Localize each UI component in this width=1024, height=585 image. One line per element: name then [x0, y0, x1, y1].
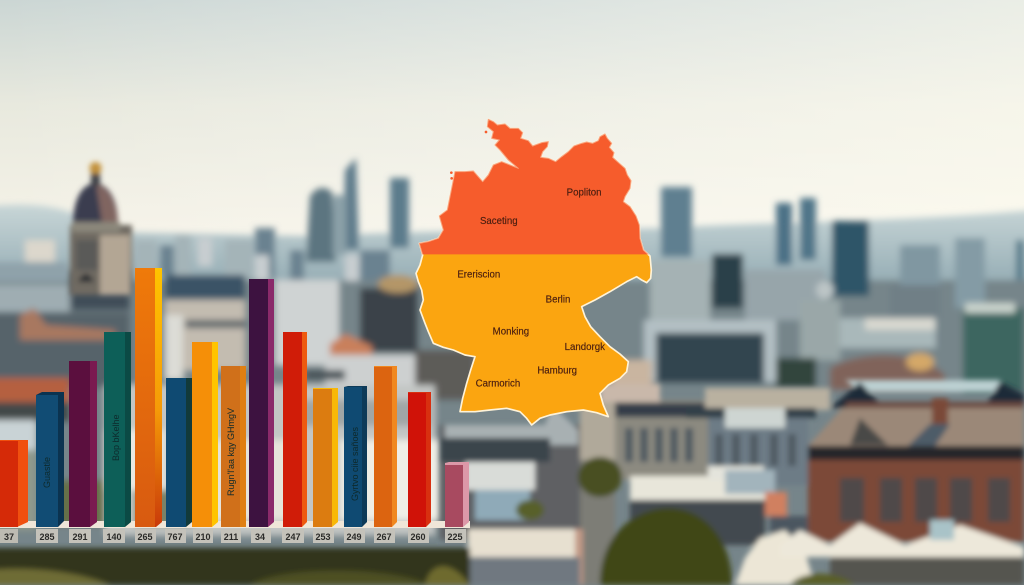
map outline: [416, 119, 651, 425]
value labels: 767: [167, 532, 183, 542]
map labels: Hamburg: [537, 365, 577, 376]
map labels: Ereriscion: [457, 269, 500, 280]
value labels: 267: [376, 532, 392, 542]
map labels: Popliton: [567, 188, 602, 199]
dome building: [70, 225, 132, 295]
distant towers right: [661, 187, 692, 257]
mid left city: [0, 285, 70, 315]
bar 8: Rugn'l'aa kqy GHmgV: [226, 408, 236, 496]
map labels: Monking: [493, 326, 529, 337]
bar chart: [0, 268, 470, 543]
map labels: Berlin: [546, 295, 570, 306]
bar 13: [374, 366, 397, 527]
value labels: 291: [72, 532, 88, 542]
map labels: [457, 188, 605, 389]
white roofs foreground: [468, 529, 580, 557]
foreground historic buildings: [615, 400, 708, 480]
background: blurred city skyline: [0, 158, 1024, 585]
bar 6: [166, 378, 192, 527]
bar 8: [221, 366, 246, 527]
value labels: 34: [255, 532, 265, 542]
trees: [600, 508, 732, 585]
bar 11: [313, 388, 338, 527]
value labels: 140: [106, 532, 122, 542]
bar 4: [104, 332, 131, 527]
bar 12: Gyrtvo ciie sañoes: [350, 426, 360, 501]
value labels: 247: [285, 532, 301, 542]
map labels: Saceting: [480, 216, 518, 227]
value labels: 211: [224, 532, 238, 542]
map islands: [450, 131, 487, 180]
value labels: 265: [137, 532, 153, 542]
map labels: Landorgk: [565, 342, 605, 353]
bar 4: Bop bKelhe: [111, 414, 121, 461]
bar 1: [0, 440, 28, 527]
chart baseline: [0, 521, 470, 528]
value labels: [0, 529, 466, 543]
value labels: 285: [39, 532, 55, 542]
value labels: 37: [4, 532, 14, 542]
value labels: 260: [410, 532, 426, 542]
bar 2: [36, 392, 64, 527]
bar 10: [283, 332, 307, 527]
map region: north (red-orange): [418, 118, 649, 254]
bar 14: [408, 392, 431, 527]
map labels: Carmorich: [476, 378, 520, 389]
distant towers left: [306, 188, 336, 262]
bar 5: [135, 268, 162, 527]
value labels: 253: [315, 532, 331, 542]
mid right city: [644, 320, 776, 382]
bar 15: [445, 462, 469, 527]
bar 3: [69, 361, 97, 527]
bar 7: [192, 342, 218, 527]
bar 2: Guastle: [42, 457, 52, 488]
value labels: 249: [346, 532, 362, 542]
value labels: 210: [195, 532, 211, 542]
bar 12: [344, 386, 367, 527]
foreground centre buildings: [440, 425, 580, 540]
map of Germany: [416, 119, 651, 425]
value labels: 225: [447, 532, 463, 542]
bar 9: [249, 279, 274, 527]
